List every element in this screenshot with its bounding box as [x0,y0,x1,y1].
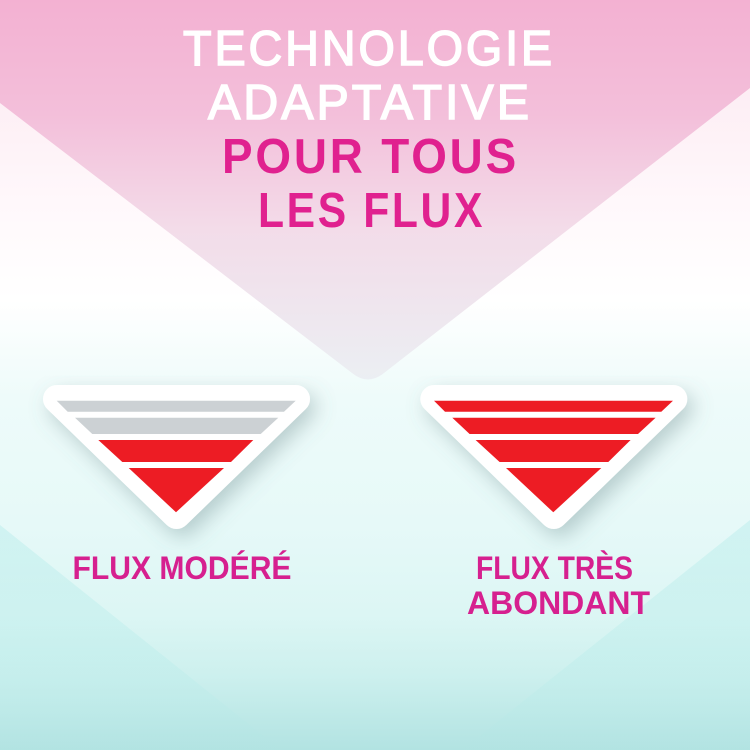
badge: flux très abondant [434,399,673,515]
red stripe 3 [98,440,253,462]
title: LES FLUX [258,184,485,238]
red stripe 1 [434,401,673,412]
lower right teal corner [462,520,750,750]
gray stripe 2 [75,418,278,434]
title: TECHNOLOGIE [183,22,555,76]
top pink chevron [0,0,750,380]
label: flux très abondant: ABONDANT [467,585,650,621]
badge background [57,399,296,515]
label: flux très abondant: FLUX TRÈS [476,550,633,586]
red stripe 4 [506,468,601,512]
badge background [434,399,673,515]
red stripe 3 [476,440,631,462]
red stripe 4 [129,468,224,512]
label: flux modéré: FLUX MODÉRÉ [72,550,292,586]
red stripe 2 [452,418,656,434]
title [183,22,555,238]
badge: flux modéré [57,399,296,515]
title: POUR TOUS [222,130,519,184]
lower left teal corner [0,525,281,750]
title: ADAPTATIVE [208,76,532,130]
gray stripe 1 [57,401,296,412]
label: flux très abondant [467,550,650,621]
